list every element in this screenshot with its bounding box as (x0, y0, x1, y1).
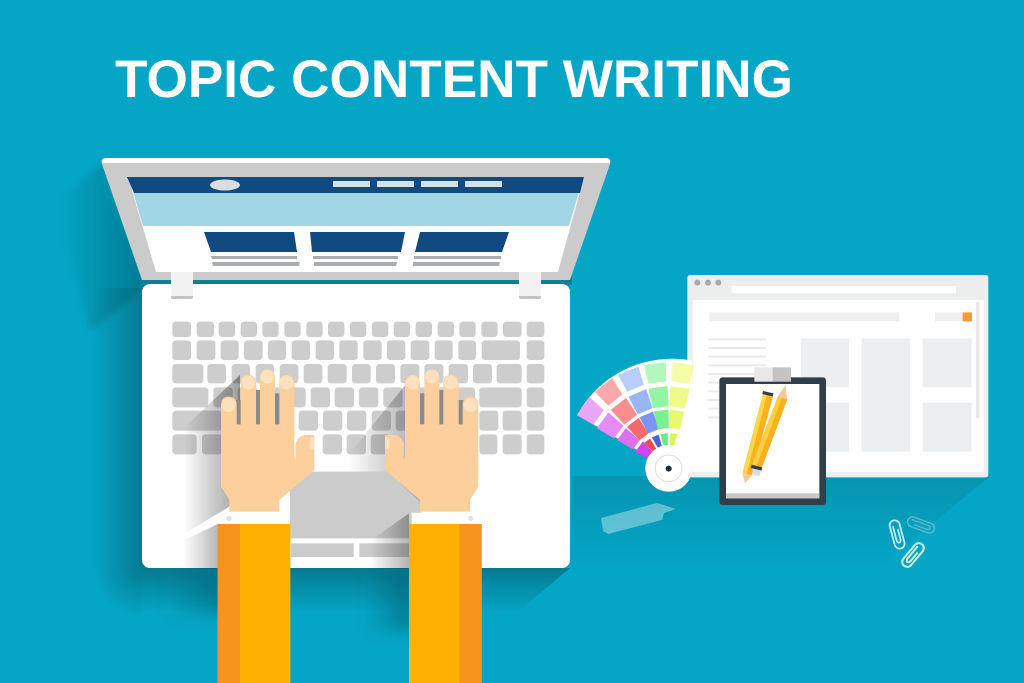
board (719, 377, 826, 505)
fan pivot disc (645, 445, 692, 492)
sidebar lines (708, 338, 766, 418)
screen white area (128, 177, 584, 272)
swatches column 5 (661, 362, 694, 448)
finger gaps (236, 390, 280, 425)
logo (210, 180, 240, 190)
keyboard, trackpad and hands (172, 322, 544, 683)
paper clip: green (900, 541, 926, 569)
browser window mockup (687, 275, 988, 477)
swatches column 2 (595, 378, 664, 458)
pencil right (751, 385, 787, 476)
swatches column 4 (644, 362, 677, 448)
left hand (221, 369, 314, 512)
palm and fingers (221, 369, 314, 512)
trackpad buttons (291, 543, 409, 557)
hero band (133, 192, 579, 226)
lid top highlight (102, 158, 610, 163)
left shirt cuff (220, 513, 290, 524)
right hand (385, 369, 478, 512)
content cards (204, 232, 509, 252)
lid frame (102, 158, 610, 280)
cast shadow: desk items (572, 476, 989, 567)
paper clip: faded (906, 516, 936, 534)
fingernails (385, 370, 478, 449)
hinges (171, 272, 541, 299)
paper clips (889, 516, 936, 569)
paper bottom strip (726, 493, 819, 498)
paper (726, 384, 819, 498)
clip (754, 367, 791, 382)
window body (693, 300, 984, 472)
window control dots (694, 280, 721, 286)
scrollbar (976, 302, 979, 418)
fingernails (222, 370, 314, 449)
search field (935, 312, 963, 321)
highlighter marker (601, 503, 676, 534)
content tiles (801, 338, 972, 452)
trackpad (290, 472, 422, 538)
left sleeve (218, 524, 290, 683)
finger gaps (419, 390, 463, 425)
laptop screen lid (102, 158, 610, 280)
clipboard (719, 367, 826, 505)
cast shadow: laptop (57, 163, 572, 630)
laptop base (142, 284, 570, 568)
search button (963, 312, 972, 321)
title: TOPIC CONTENT WRITING (115, 50, 793, 109)
paper clip: bright (889, 519, 906, 550)
hand and arm shadows (183, 375, 422, 568)
keyboard (172, 322, 544, 454)
pencil left (743, 391, 774, 483)
nav items (333, 181, 502, 187)
palm and fingers (385, 369, 478, 512)
right sleeve (409, 524, 482, 683)
card text lines (211, 256, 501, 266)
navigation bar (127, 177, 584, 193)
swatches column 1 (577, 397, 658, 464)
swatches column 3 (618, 367, 671, 453)
color swatch fan (577, 359, 694, 492)
window frame (687, 275, 988, 477)
fan body (577, 359, 694, 468)
right shirt cuff (412, 513, 480, 524)
header bar (709, 312, 899, 321)
address bar (732, 286, 956, 293)
